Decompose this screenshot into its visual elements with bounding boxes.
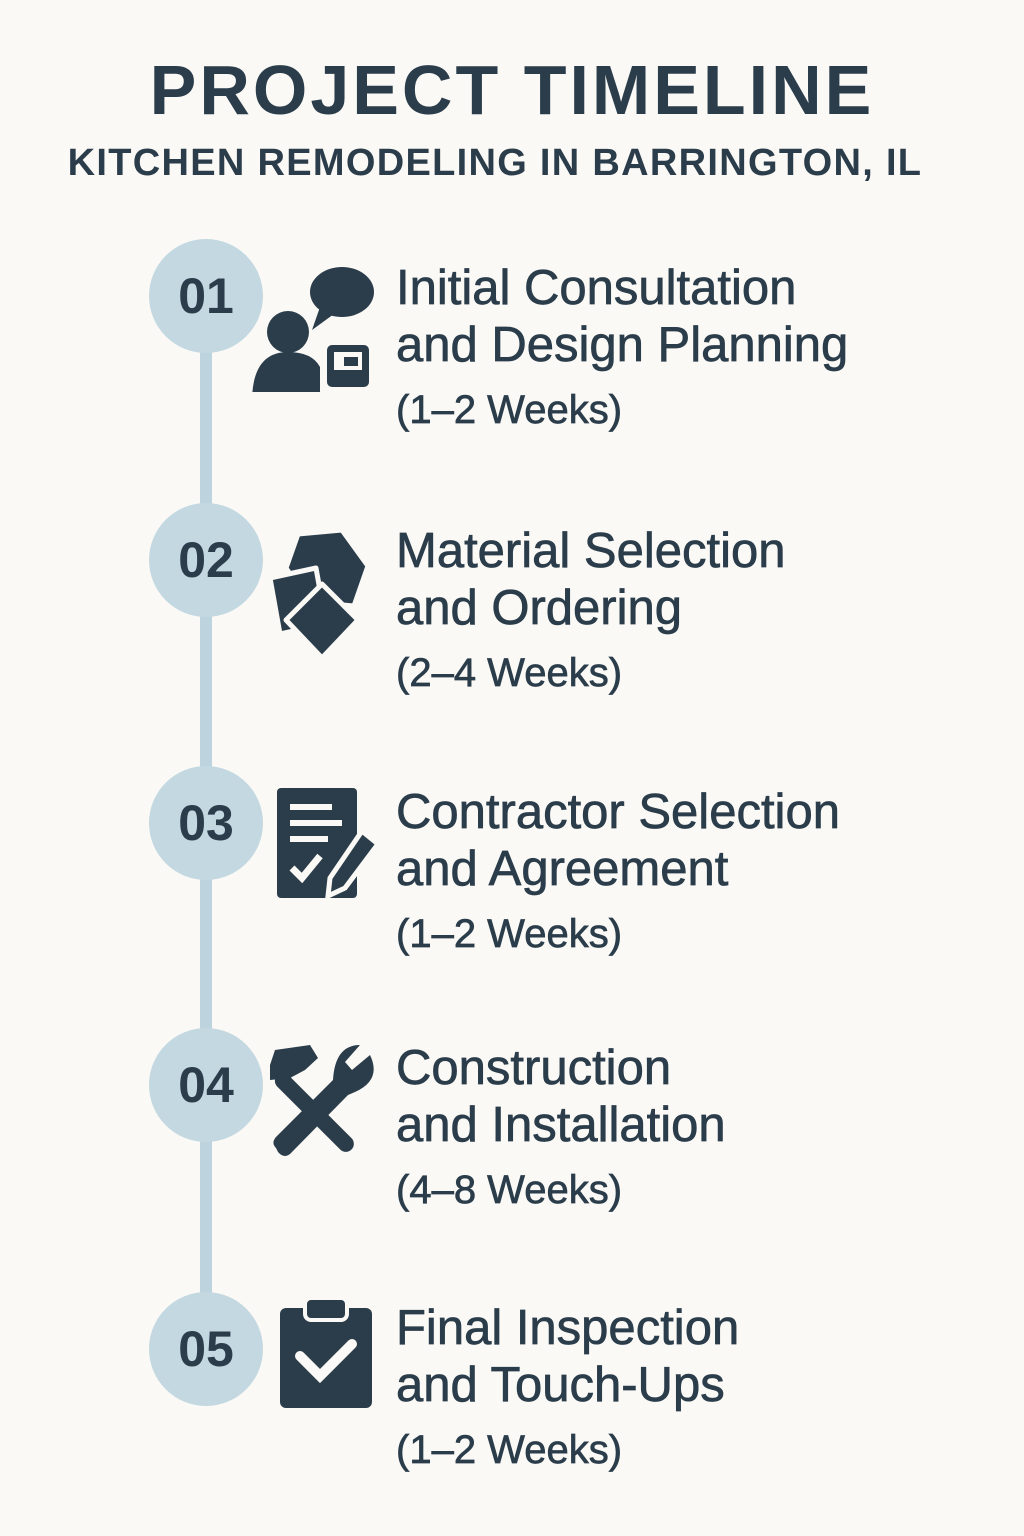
step 3 text: and Agreement bbox=[396, 842, 728, 896]
step 2 text: Material Selection bbox=[396, 524, 785, 578]
step 2 text: (2–4 Weeks) bbox=[396, 651, 622, 695]
step 4 text: (4–8 Weeks) bbox=[396, 1168, 622, 1212]
timeline line bbox=[200, 300, 212, 1350]
step 1 text bbox=[396, 261, 848, 432]
step 3 text: (1–2 Weeks) bbox=[396, 912, 622, 956]
step 5 text: Final Inspection bbox=[396, 1301, 739, 1355]
step 5 text bbox=[396, 1301, 739, 1472]
title: PROJECT TIMELINE bbox=[150, 51, 874, 129]
step 1 number: 01 bbox=[178, 268, 234, 324]
step 3 text: Contractor Selection bbox=[396, 785, 840, 839]
step 2 number bbox=[149, 503, 263, 617]
step 1 text: (1–2 Weeks) bbox=[396, 388, 622, 432]
icon: consultation bbox=[252, 267, 374, 392]
step 4 number: 04 bbox=[178, 1057, 234, 1113]
subtitle: KITCHEN REMODELING IN BARRINGTON, IL bbox=[68, 142, 922, 184]
icon: materials bbox=[272, 532, 366, 654]
step 4 number bbox=[149, 1028, 263, 1142]
step 5 text: (1–2 Weeks) bbox=[396, 1428, 622, 1472]
step 3 number: 03 bbox=[178, 795, 234, 851]
icon: clipboard bbox=[280, 1300, 372, 1408]
step 3 text bbox=[396, 785, 840, 956]
step 2 number: 02 bbox=[178, 532, 234, 588]
step 5 text: and Touch-Ups bbox=[396, 1358, 725, 1412]
icon: tools bbox=[270, 1045, 374, 1156]
step 1 text: and Design Planning bbox=[396, 318, 848, 372]
step 5 number: 05 bbox=[178, 1321, 234, 1377]
step 2 text bbox=[396, 524, 785, 695]
step 4 text bbox=[396, 1041, 726, 1212]
step 1 text: Initial Consultation bbox=[396, 261, 796, 315]
step 2 text: and Ordering bbox=[396, 581, 682, 635]
step 5 number bbox=[149, 1292, 263, 1406]
step 1 number bbox=[149, 239, 263, 353]
step 4 text: and Installation bbox=[396, 1098, 726, 1152]
step 4 text: Construction bbox=[396, 1041, 671, 1095]
icon: contract bbox=[277, 788, 374, 898]
step 3 number bbox=[149, 766, 263, 880]
